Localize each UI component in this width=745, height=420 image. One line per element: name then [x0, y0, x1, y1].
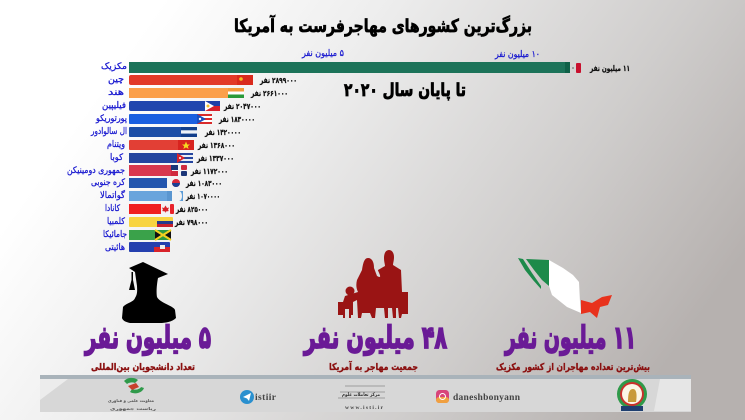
row: Philippines	[102, 101, 261, 111]
row: El Salvador	[90, 127, 241, 137]
row: South Korea: کره جنوبی	[91, 178, 126, 188]
row: Colombia: کلمبیا	[107, 217, 126, 227]
row: Dominican Republic	[67, 165, 228, 176]
caption: most migrants from Mexico: بیش‌ترین تعداده مهاجران از کشور مکزیک	[496, 362, 650, 373]
row: Puerto Rico	[95, 114, 255, 124]
row: Haiti	[105, 242, 170, 253]
stat: 5 million	[84, 320, 211, 373]
icon: graduate silhouette	[122, 262, 176, 323]
row: Vietnam	[107, 140, 235, 150]
row: Puerto Rico: ۱۸۳۰۰۰۰ نفر	[218, 115, 255, 124]
row: Cuba: کوبا	[110, 153, 124, 163]
row: Mexico	[101, 62, 630, 73]
row: Jamaica: جامائیکا	[103, 230, 127, 240]
instagram handle: daneshbonyann	[453, 393, 521, 403]
row: Vietnam: ویتنام	[107, 140, 125, 150]
row: Dominican Republic: ۱۱۷۲۰۰۰ نفر	[190, 167, 228, 176]
row: Canada: کانادا	[105, 204, 121, 214]
telegram handle: istiir	[255, 393, 277, 403]
row: Dominican Republic: جمهوری دومینیکن	[67, 166, 125, 176]
row: Colombia: ۷۹۸۰۰۰ نفر	[174, 218, 208, 227]
row: Mexico: مکزیک	[101, 62, 127, 72]
row: Mexico: ۱۱ میلیون نفر	[589, 64, 630, 73]
logo: left organisation: معاونت علمی و فناوری	[108, 398, 155, 403]
caption: migrant population in US: جمعیت مهاجر به آمریکا	[329, 360, 418, 373]
axis label: 10 million: ۱۰ میلیون نفر	[494, 50, 540, 60]
row: India: هند	[108, 88, 124, 98]
logo: left organisation	[108, 378, 157, 411]
caption: international students: تعداد دانشجویان بین‌المللی	[91, 362, 195, 373]
logo: centre organisation: مرکز تعاملات علوم	[342, 392, 380, 398]
row: Puerto Rico: پورتوریکو	[95, 114, 127, 124]
axis label: 5 million: ۵ میلیون نفر	[301, 49, 344, 59]
logo: right emblem	[617, 379, 647, 411]
row: China: ۲۸۹۹۰۰۰ نفر	[259, 76, 297, 85]
row: Canada	[105, 204, 208, 214]
stat: 48 million	[303, 320, 447, 373]
row: Jamaica	[103, 230, 171, 240]
row: Haiti: هائیتی	[105, 243, 125, 253]
row: China: چین	[108, 75, 124, 85]
stat: 11 million: ۱۱ میلیون نفر	[504, 320, 636, 356]
row: Guatemala	[100, 189, 220, 201]
row: Guatemala: ۱۰۷۰۰۰۰ نفر	[185, 192, 220, 201]
row: South Korea	[91, 178, 222, 188]
row: Philippines: فیلیپین	[102, 101, 126, 111]
telegram handle	[240, 390, 277, 404]
row: Cuba: ۱۳۳۷۰۰۰ نفر	[196, 154, 234, 163]
row: China	[108, 75, 297, 85]
row: Philippines: ۲۰۴۷۰۰۰ نفر	[223, 102, 261, 111]
subtitle: until end of 2020: تا پایان سال ۲۰۲۰	[344, 80, 466, 101]
row: Guatemala: گواتمالا	[100, 189, 126, 201]
row: India: ۲۶۶۱۰۰۰ نفر	[250, 89, 288, 98]
row: India	[108, 88, 288, 98]
bar chart	[67, 62, 630, 253]
icon: family silhouette	[338, 250, 408, 318]
row: South Korea: ۱۰۸۳۰۰۰ نفر	[185, 179, 222, 188]
stat: 11 million	[496, 320, 650, 373]
logo: left organisation: ریاست جمهوری	[110, 406, 157, 411]
title: بزرگ‌ترین کشورهای مهاجرفرست به آمریکا	[234, 14, 532, 37]
footer band	[40, 375, 691, 412]
row: Colombia	[107, 217, 208, 227]
stat: 48 million: ۴۸ میلیون نفر	[303, 320, 447, 356]
stat: 5 million: ۵ میلیون نفر	[84, 320, 211, 356]
logo: centre organisation: www.isti.ir	[345, 405, 384, 411]
row: Cuba	[110, 153, 234, 163]
icon: Mexico flag map	[518, 258, 612, 318]
logo: centre organisation	[338, 386, 385, 411]
instagram handle	[436, 390, 521, 403]
row: El Salvador: ۱۴۲۰۰۰۰ نفر	[204, 128, 241, 137]
row: El Salvador: ال سالوادور	[90, 127, 127, 137]
row: Canada: ۸۲۵۰۰۰ نفر	[175, 205, 208, 214]
row: Vietnam: ۱۳۶۸۰۰۰ نفر	[197, 141, 235, 150]
